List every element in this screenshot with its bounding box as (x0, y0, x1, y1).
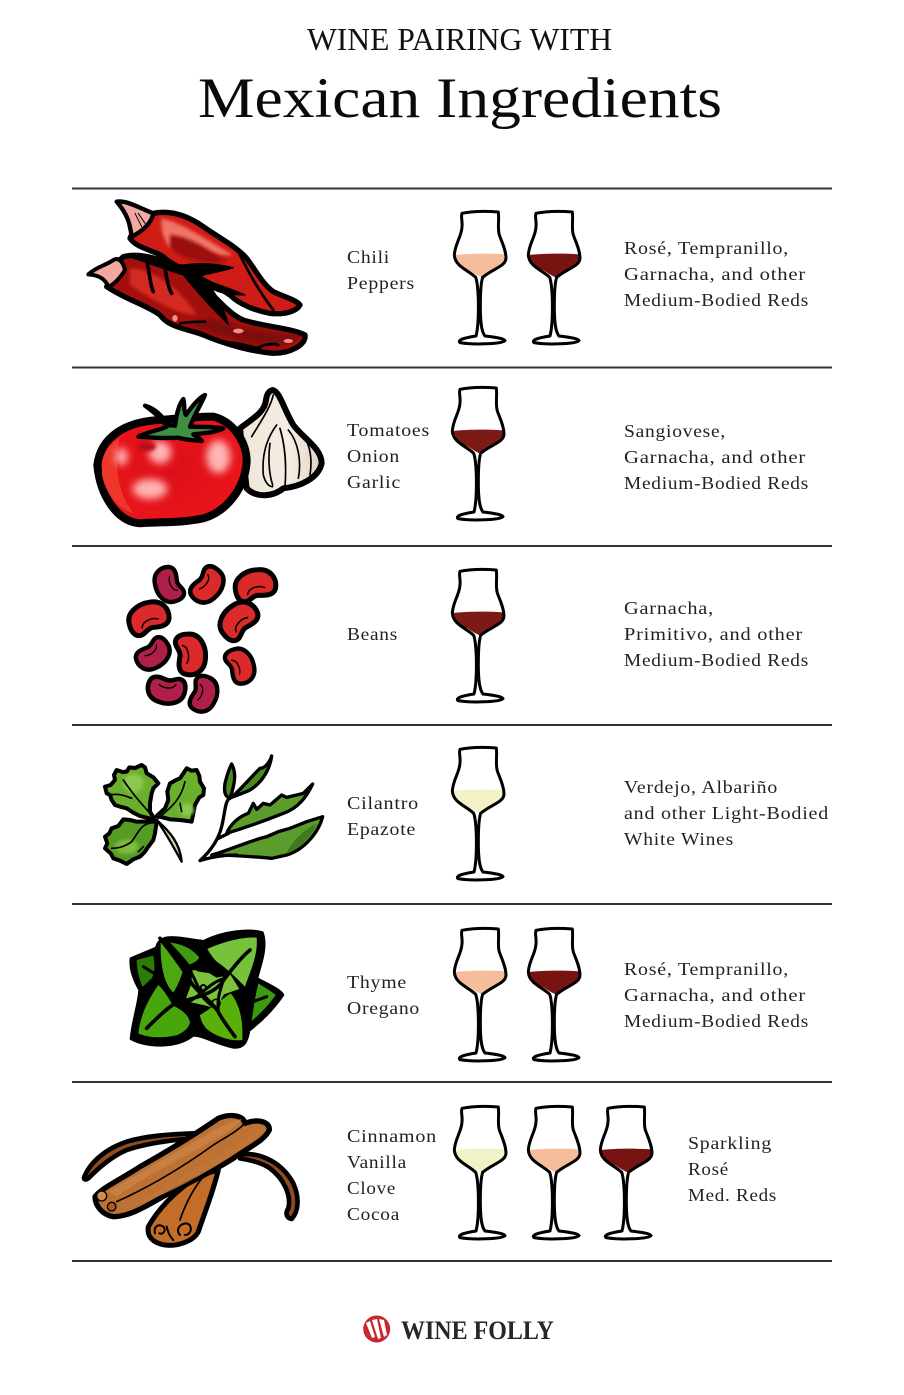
ingredient label: Cinnamon (347, 1126, 437, 1146)
wine pairing text (688, 1133, 777, 1205)
ingredient label (347, 793, 419, 839)
ingredient label: Cilantro (347, 793, 419, 813)
panel: thyme row (130, 928, 809, 1061)
icon: rosé wine glass (454, 928, 506, 1061)
icon: cinnamon and vanilla (84, 1116, 298, 1245)
title line 1: WINE PAIRING WITH (307, 21, 612, 57)
wine pairing text: and other Light-Bodied (624, 803, 829, 823)
ingredient label (347, 420, 430, 492)
icon: rosé wine glass (454, 211, 506, 344)
wine pairing text: Garnacha, and other (624, 264, 806, 284)
icon: white wine glass (452, 747, 504, 880)
wine pairing text: Rosé (688, 1159, 729, 1179)
logo: Wine Folly (363, 1316, 554, 1345)
ingredient label: Vanilla (347, 1152, 407, 1172)
title (198, 21, 722, 130)
icon: red wine glass (600, 1106, 652, 1239)
wine pairing text: Medium-Bodied Reds (624, 650, 809, 670)
ingredient label: Clove (347, 1178, 396, 1198)
wine pairing text: Sangiovese, (624, 421, 726, 441)
wine pairing text: Primitivo, and other (624, 624, 803, 644)
ingredient label: Chili (347, 247, 390, 267)
icon: white wine glass (454, 1106, 506, 1239)
ingredient label: Garlic (347, 472, 401, 492)
wine pairing text: Medium-Bodied Reds (624, 290, 809, 310)
wine pairing text (624, 598, 809, 670)
icon: oregano leaves (130, 931, 283, 1048)
ingredient label: Beans (347, 624, 398, 644)
wine pairing text: Rosé, Tempranillo, (624, 238, 789, 258)
wine pairing text: Medium-Bodied Reds (624, 473, 809, 493)
icon: logo mark (363, 1316, 390, 1342)
icon: red wine glass (528, 928, 580, 1061)
icon: tomato and garlic (97, 390, 322, 523)
ingredient label (347, 1126, 437, 1224)
panel: tomatoes row (97, 387, 809, 523)
panel: beans row (125, 563, 809, 716)
ingredient label: Cocoa (347, 1204, 400, 1224)
wine pairing text: Rosé, Tempranillo, (624, 959, 789, 979)
wine pairing text (624, 777, 829, 849)
wine pairing text: Med. Reds (688, 1185, 777, 1205)
wine pairing text (624, 959, 809, 1031)
wine pairing text: Verdejo, Albariño (624, 777, 778, 797)
ingredient label: Epazote (347, 819, 416, 839)
ingredient label: Peppers (347, 273, 415, 293)
ingredient label: Onion (347, 446, 400, 466)
panel: cinnamon row (84, 1106, 777, 1245)
icon: red wine glass (528, 211, 580, 344)
wine pairing text: Garnacha, and other (624, 447, 806, 467)
icon: chili peppers (88, 201, 305, 353)
icon: red wine glass (452, 569, 504, 702)
wine pairing text: White Wines (624, 829, 734, 849)
panel: cilantro row (105, 747, 829, 880)
title line 2: Mexican Ingredients (198, 67, 722, 130)
wine pairing text: Garnacha, (624, 598, 714, 618)
panel: chili peppers row (88, 201, 809, 353)
ingredient label: Oregano (347, 998, 420, 1018)
icon: red wine glass (452, 387, 504, 520)
ingredient label: Thyme (347, 972, 407, 992)
icon: rosé wine glass (528, 1106, 580, 1239)
wine pairing text: Medium-Bodied Reds (624, 1011, 809, 1031)
wine pairing text (624, 421, 809, 493)
ingredient label: Tomatoes (347, 420, 430, 440)
wine pairing text (624, 238, 809, 310)
wine pairing text: Garnacha, and other (624, 985, 806, 1005)
wine pairing text: Sparkling (688, 1133, 772, 1153)
ingredient label (347, 972, 420, 1018)
ingredient label (347, 247, 415, 293)
brand name: WINE FOLLY (401, 1316, 554, 1345)
icon: cilantro and epazote (105, 756, 323, 864)
icon: beans (125, 563, 278, 716)
